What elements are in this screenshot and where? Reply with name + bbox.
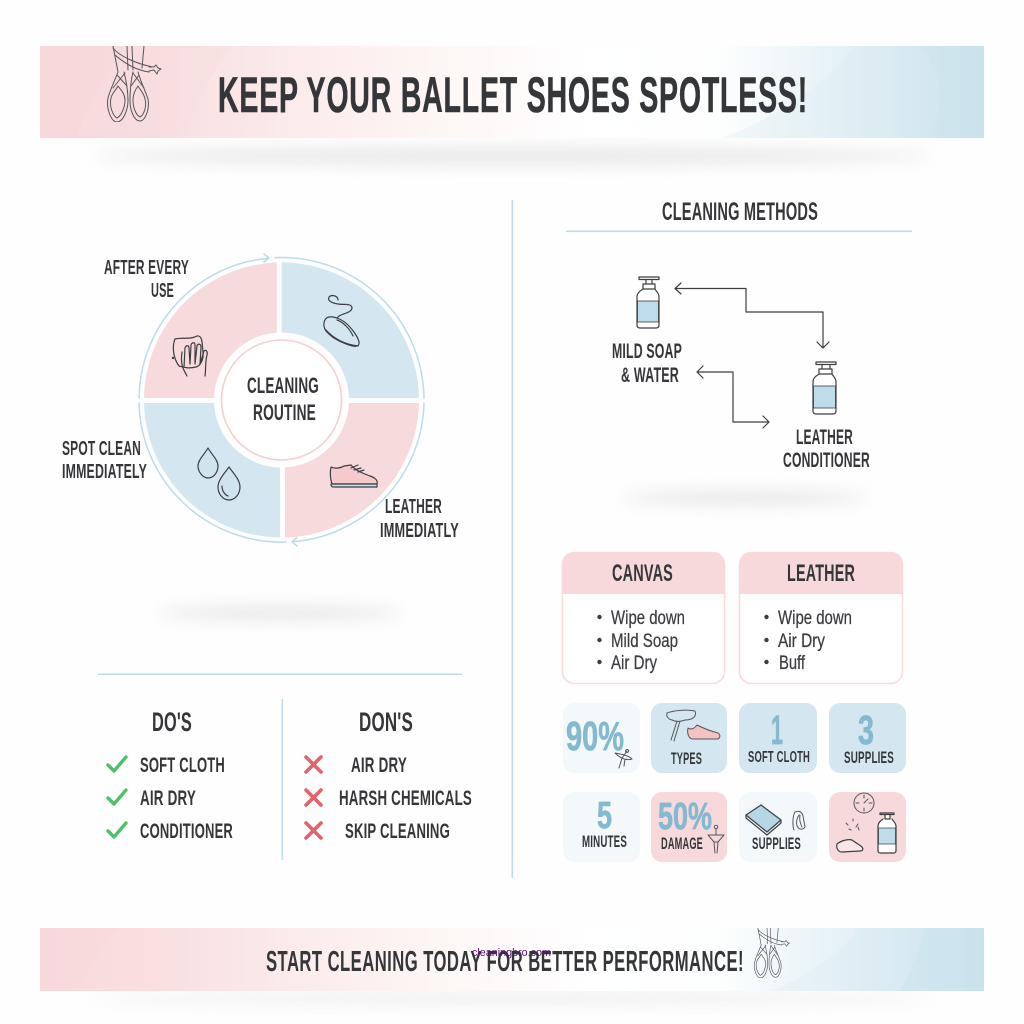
label: leather immediatly [380,496,459,542]
stat tile: 50% damage: DAMAGE [661,834,703,853]
icon: shoe with steam [324,296,359,346]
list: don'ts items: AIR DRY [351,754,407,777]
label: spot clean immediately: SPOT CLEAN [62,438,141,460]
heading: canvas: CANVAS [612,560,673,587]
stat tile: clock, bottle and shoe [829,792,906,862]
icon: water drops [198,448,240,500]
heading: leather: LEATHER [787,560,855,587]
stat tile: 5 minutes: MINUTES [582,832,627,851]
label: leather immediatly: IMMEDIATLY [380,520,459,542]
divider: vertical centre [512,200,513,878]
centre label: ROUTINE [253,400,316,425]
heading: don'ts: DON'S [359,707,413,737]
list: leather steps: Wipe down [778,608,852,629]
label: mild soap and water: MILD SOAP [612,340,682,363]
stat tile: 3 supplies [829,703,906,773]
label: mild soap and water [612,340,682,387]
watermark: cleaningbro.com [472,947,551,959]
label: after every use [104,257,189,302]
stat tile: 1 soft cloth: SOFT CLOTH [748,749,810,766]
arrow: water to conditioner [697,366,769,428]
stat tile: 5 minutes: 5 [597,795,612,837]
arrow: soap to conditioner [675,283,829,348]
panel: leather card [739,552,903,684]
icon: cloth and hand [172,336,207,376]
list: do's items: SOFT CLOTH [140,754,225,777]
shadow under wheel [158,607,402,619]
centre label: CLEANING [247,373,319,398]
divider: do and don't [282,699,283,860]
list: canvas steps: Mild Soap [611,631,678,652]
list: canvas steps [597,608,685,674]
label: spot clean immediately [62,438,147,483]
stat tile: 90%: 90% [566,713,624,759]
list: canvas steps: Wipe down [611,608,685,629]
label: leather conditioner: CONDITIONER [783,449,870,472]
icon: sneaker [330,465,377,487]
stat tile: 50% damage [651,792,727,862]
panel: don'ts [306,707,472,843]
footer banner [40,928,984,1003]
panel: cleaning routine wheel [62,254,459,546]
stat tile: 3 supplies: 3 [858,707,874,753]
list: don'ts items: SKIP CLEANING [345,820,450,843]
list: do's items [108,754,233,843]
stat tile: 1 soft cloth [739,703,817,773]
stat tile: supplies: SUPPLIES [752,834,801,853]
icon: ballet shoes [108,46,161,122]
divider: left horizontal [98,674,462,675]
heading: do's: DO'S [152,707,192,737]
label: leather conditioner: LEATHER [796,426,853,449]
list: leather steps: Air Dry [778,631,825,652]
stat tile: 1 soft cloth: 1 [771,707,783,753]
icon: ballet shoes small [754,928,789,978]
list: leather steps [764,608,852,674]
label: leather immediatly: LEATHER [385,496,442,518]
wheel segments [135,255,430,545]
heading: cleaning methods: CLEANING METHODS [662,198,818,226]
panel: cleaning methods [566,198,912,472]
stat tile: types [651,703,727,773]
label: after every use: USE [151,280,174,302]
stat tile: 90% [563,703,640,773]
panel: do's [108,707,233,843]
stat tile: types: TYPES [671,749,702,768]
list: leather steps: Buff [779,653,806,674]
icon: soap bottle [637,277,659,328]
stat tile: supplies [739,792,817,862]
list: do's items: AIR DRY [140,787,196,810]
label: mild soap and water: & WATER [621,364,679,387]
label: after every use: AFTER EVERY [104,257,189,279]
panel: canvas card [562,552,725,684]
label: leather conditioner [783,426,870,472]
label: spot clean immediately: IMMEDIATELY [62,461,147,483]
stat tile: 3 supplies: SUPPLIES [844,748,894,767]
list: don'ts items: HARSH CHEMICALS [339,787,472,810]
centre label [247,373,319,425]
stat tile: 50% damage: 50% [658,796,712,838]
icon: conditioner bottle [813,362,836,414]
list: do's items: CONDITIONER [140,820,233,843]
header banner [40,46,984,165]
list: don'ts items [306,754,472,843]
stat tile: 5 minutes [563,792,640,862]
circular arrow ring [139,254,424,546]
list: canvas steps: Air Dry [611,653,657,674]
shadow under methods [623,492,867,504]
